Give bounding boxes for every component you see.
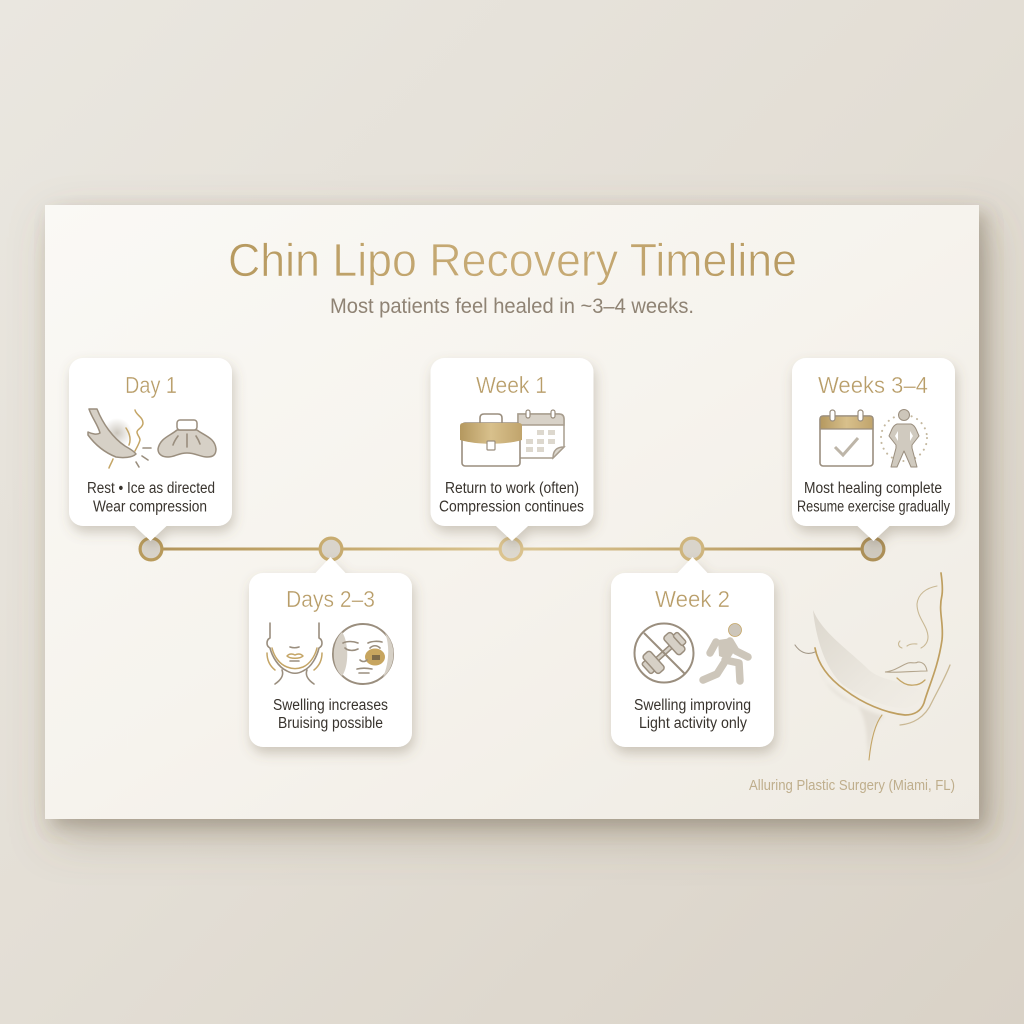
footer credit: Alluring Plastic Surgery (Miami, FL): [749, 778, 955, 794]
panel: Days 2–3: Days 2–3: [286, 586, 375, 612]
panel: Week 1: Compression continues: [439, 498, 584, 516]
title: Chin Lipo Recovery Timeline: [228, 234, 797, 286]
panel: Week 2: [611, 557, 774, 747]
icon: calendar check and standing person: [820, 410, 927, 467]
panel: Week 1: Week 1: [476, 372, 547, 398]
panel: Weeks 3–4: [792, 358, 955, 541]
timeline with nodes: [140, 538, 884, 560]
panel: Week 2: Swelling improving: [634, 697, 751, 714]
panel: Day 1: Day 1: [125, 372, 177, 398]
panel: Week 2: Week 2: [655, 586, 730, 612]
panel: Days 2–3: [249, 557, 412, 747]
panel: Day 1: Rest • Ice as directed: [87, 480, 215, 497]
panel: Week 1: Return to work (often): [445, 480, 579, 497]
panel: Weeks 3–4: Most healing complete: [804, 480, 942, 497]
panel: main card: [45, 205, 979, 819]
subtitle: Most patients feel healed in ~3–4 weeks.: [330, 294, 694, 318]
icon: swollen jaw and bruised face: [267, 623, 393, 684]
icon: briefcase and calendar: [460, 410, 564, 466]
icon: chin strap and ice pack: [88, 409, 216, 468]
illustration: face line art: [795, 573, 950, 760]
panel: Days 2–3: Bruising possible: [278, 715, 383, 732]
icon: no weights and runner: [634, 624, 748, 682]
panel: Day 1: [69, 358, 232, 541]
panel: Day 1: Wear compression: [93, 498, 207, 516]
panel: Weeks 3–4: Resume exercise gradually: [797, 498, 950, 516]
panel: Week 2: Light activity only: [639, 715, 747, 732]
panel: Days 2–3: Swelling increases: [273, 697, 388, 714]
panel: Week 1: [430, 358, 594, 541]
panel: Weeks 3–4: Weeks 3–4: [818, 372, 928, 398]
